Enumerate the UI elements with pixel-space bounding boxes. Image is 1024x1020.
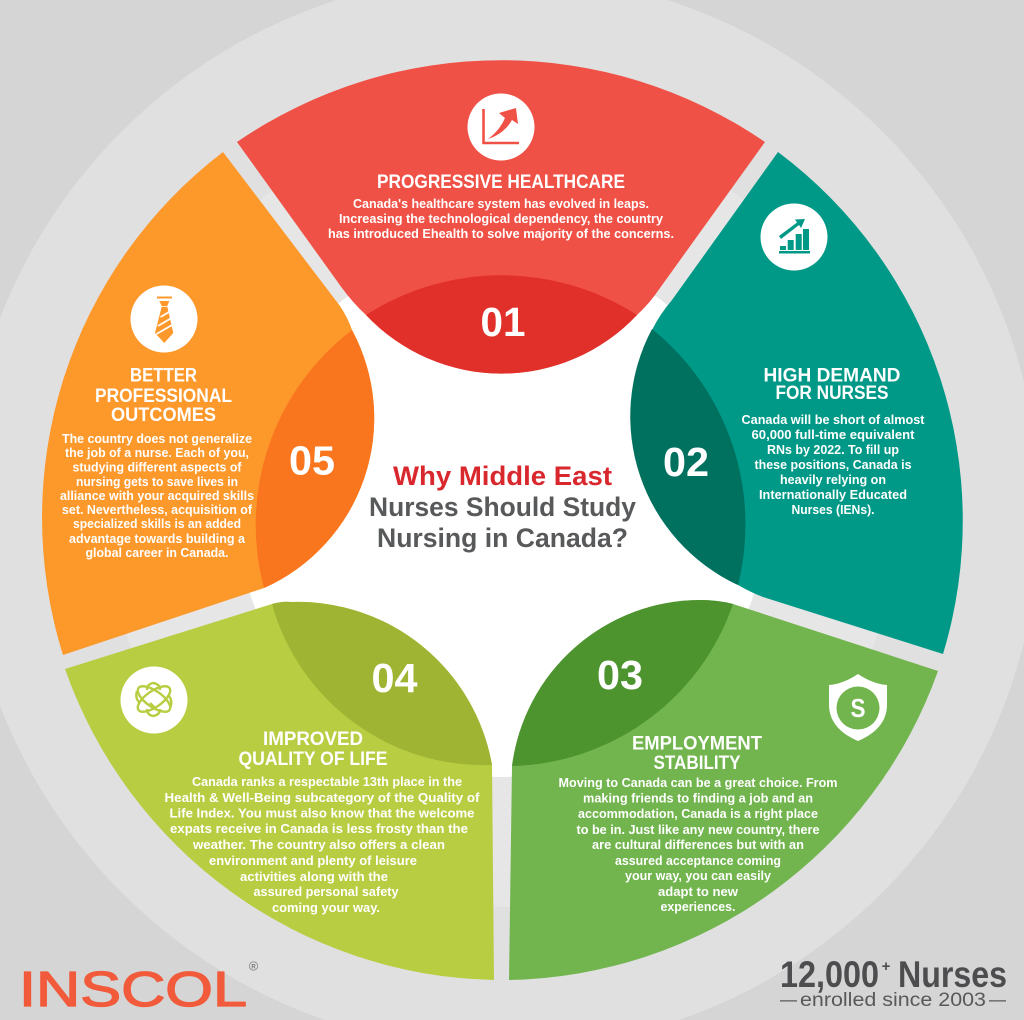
text block: high demand: Nurses (IENs). xyxy=(792,503,874,517)
text block: better professional outcomes: studying different aspects of xyxy=(72,460,242,474)
text block: employment stability: adapt to new xyxy=(658,885,738,899)
panel: 03 employment stability xyxy=(509,600,938,980)
center title xyxy=(369,461,636,553)
icon: bar chart with arrow xyxy=(760,204,828,270)
text block: better professional outcomes xyxy=(60,432,254,560)
text block: employment stability: making friends to finding a job and an xyxy=(583,792,813,806)
text block: high demand: Canada will be short of almost xyxy=(742,413,925,427)
stat: 12,000+ nurses enrolled: + xyxy=(882,958,891,975)
icon: atom xyxy=(120,666,188,734)
stat: 12,000+ nurses enrolled: — xyxy=(780,990,797,1011)
heading: improved quality of life xyxy=(238,729,388,770)
text block: better professional outcomes: nursing gets to save lives in xyxy=(76,475,238,489)
heading: better professional outcomes: BETTER xyxy=(130,366,197,386)
heading: better professional outcomes xyxy=(95,366,232,426)
text block: employment stability xyxy=(558,776,838,914)
number lens: 03: 03 xyxy=(597,652,643,698)
panel: 01 progressive healthcare xyxy=(237,60,765,374)
heading: high demand for nurses: HIGH DEMAND xyxy=(764,366,900,386)
text block: improved quality of life: environment and plenty of leisure xyxy=(209,854,417,868)
center title: Nursing in Canada? xyxy=(377,523,628,553)
stat: 12,000+ nurses enrolled: enrolled since 2003 xyxy=(800,990,986,1011)
panel: 02 high demand for nurses xyxy=(630,152,963,654)
text block: better professional outcomes: set. Nevertheless, acquisition of xyxy=(62,503,253,517)
number lens: 02: 02 xyxy=(663,439,709,485)
panel: 05 better professional outcomes xyxy=(42,152,374,655)
text block: progressive healthcare: Increasing the technological dependency, the country xyxy=(339,212,663,226)
heading: better professional outcomes: OUTCOMES xyxy=(111,405,216,426)
text block: better professional outcomes: alliance with your acquired skills xyxy=(60,489,254,503)
icon: chart with rising arrow xyxy=(468,94,534,160)
heading: employment stability: STABILITY xyxy=(654,753,741,774)
text block: improved quality of life: coming your way. xyxy=(272,901,380,915)
text block: progressive healthcare: has introduced Ehealth to solve majority of the concerns. xyxy=(328,227,674,241)
text block: high demand xyxy=(742,413,925,517)
text block: improved quality of life: weather. The country also offers a clean xyxy=(192,838,445,852)
text block: progressive healthcare xyxy=(328,197,674,241)
text block: employment stability: to be in. Just like any new country, there xyxy=(576,823,820,837)
stat: 12,000+ nurses enrolled: Nurses xyxy=(898,954,1007,995)
number lens: 01: 01 xyxy=(480,299,526,345)
text block: high demand: Internationally Educated xyxy=(759,488,907,502)
heading: high demand for nurses xyxy=(764,366,900,404)
text block: high demand: 60,000 full-time equivalent xyxy=(752,428,915,442)
text block: employment stability: Moving to Canada can be a great choice. From xyxy=(558,776,838,790)
heading: improved quality of life: QUALITY OF LIFE xyxy=(238,749,388,770)
text block: employment stability: experiences. xyxy=(660,900,736,914)
heading: better professional outcomes: PROFESSIONAL xyxy=(95,386,232,407)
number lens: 04: 04 xyxy=(372,655,418,701)
text block: employment stability: your way, you can easily xyxy=(625,869,771,883)
text block: improved quality of life: expats receive in Canada is less frosty than the xyxy=(170,822,468,836)
text block: high demand: these positions, Canada is xyxy=(754,458,912,472)
text block: improved quality of life: Health & Well-Being subcategory of the Quality of xyxy=(164,791,480,805)
text block: high demand: heavily relying on xyxy=(780,473,886,487)
center title: Why Middle East xyxy=(393,461,612,491)
segment shape: red xyxy=(237,60,765,374)
segment shape: teal xyxy=(631,152,963,654)
number lens: 05: 05 xyxy=(289,438,335,484)
segment shape: orange xyxy=(42,152,374,655)
number lens: 03 xyxy=(512,600,733,766)
number lens: 04 xyxy=(272,602,492,765)
icon: shield with S xyxy=(829,674,887,741)
heading: employment stability xyxy=(632,734,762,774)
text block: employment stability: are cultural differences but with an xyxy=(592,838,804,852)
text block: better professional outcomes: advantage towards building a xyxy=(69,532,246,546)
heading: employment stability: EMPLOYMENT xyxy=(632,734,762,754)
icon: shield with S: S xyxy=(850,693,866,723)
heading: progressive healthcare: PROGRESSIVE HEALTHCARE xyxy=(377,172,625,193)
stat: 12,000+ nurses enrolled: 12,000 xyxy=(780,954,879,995)
text block: improved quality of life xyxy=(164,775,480,915)
text block: employment stability: assured acceptance coming xyxy=(615,854,781,868)
text block: high demand: RNs by 2022. To fill up xyxy=(767,443,899,457)
text block: improved quality of life: Life Index. You must also know that the welcome xyxy=(170,806,475,820)
number lens: 01 xyxy=(366,275,637,374)
stat: 12,000+ nurses enrolled: — xyxy=(989,990,1006,1011)
heading: high demand for nurses: FOR NURSES xyxy=(776,383,888,404)
segment shape: lime xyxy=(65,602,494,980)
number lens: 05 xyxy=(256,330,374,588)
number lens: 02 xyxy=(630,329,745,585)
text block: better professional outcomes: global career in Canada. xyxy=(86,546,228,560)
heading: improved quality of life: IMPROVED xyxy=(263,729,363,750)
logo: INSCOL: INSCOL xyxy=(19,963,247,1017)
text block: employment stability: accommodation, Canada is a right place xyxy=(578,807,818,821)
text block: better professional outcomes: the job of a nurse. Each of you, xyxy=(65,446,249,460)
text block: improved quality of life: assured personal safety xyxy=(254,885,399,899)
center title: Nurses Should Study xyxy=(369,492,636,522)
logo: INSCOL: R xyxy=(251,964,256,970)
icon: necktie xyxy=(130,286,198,352)
text block: progressive healthcare: Canada's healthcare system has evolved in leaps. xyxy=(353,197,649,211)
text block: improved quality of life: Canada ranks a respectable 13th place in the xyxy=(192,775,462,789)
text block: improved quality of life: activities along with the xyxy=(240,870,388,884)
panel: 04 improved quality of life xyxy=(65,602,494,980)
text block: better professional outcomes: The country does not generalize xyxy=(62,432,252,446)
text block: better professional outcomes: specialized skills is an added xyxy=(73,517,241,531)
segment shape: green xyxy=(509,600,938,980)
stat: 12,000+ nurses enrolled xyxy=(780,954,1007,1011)
